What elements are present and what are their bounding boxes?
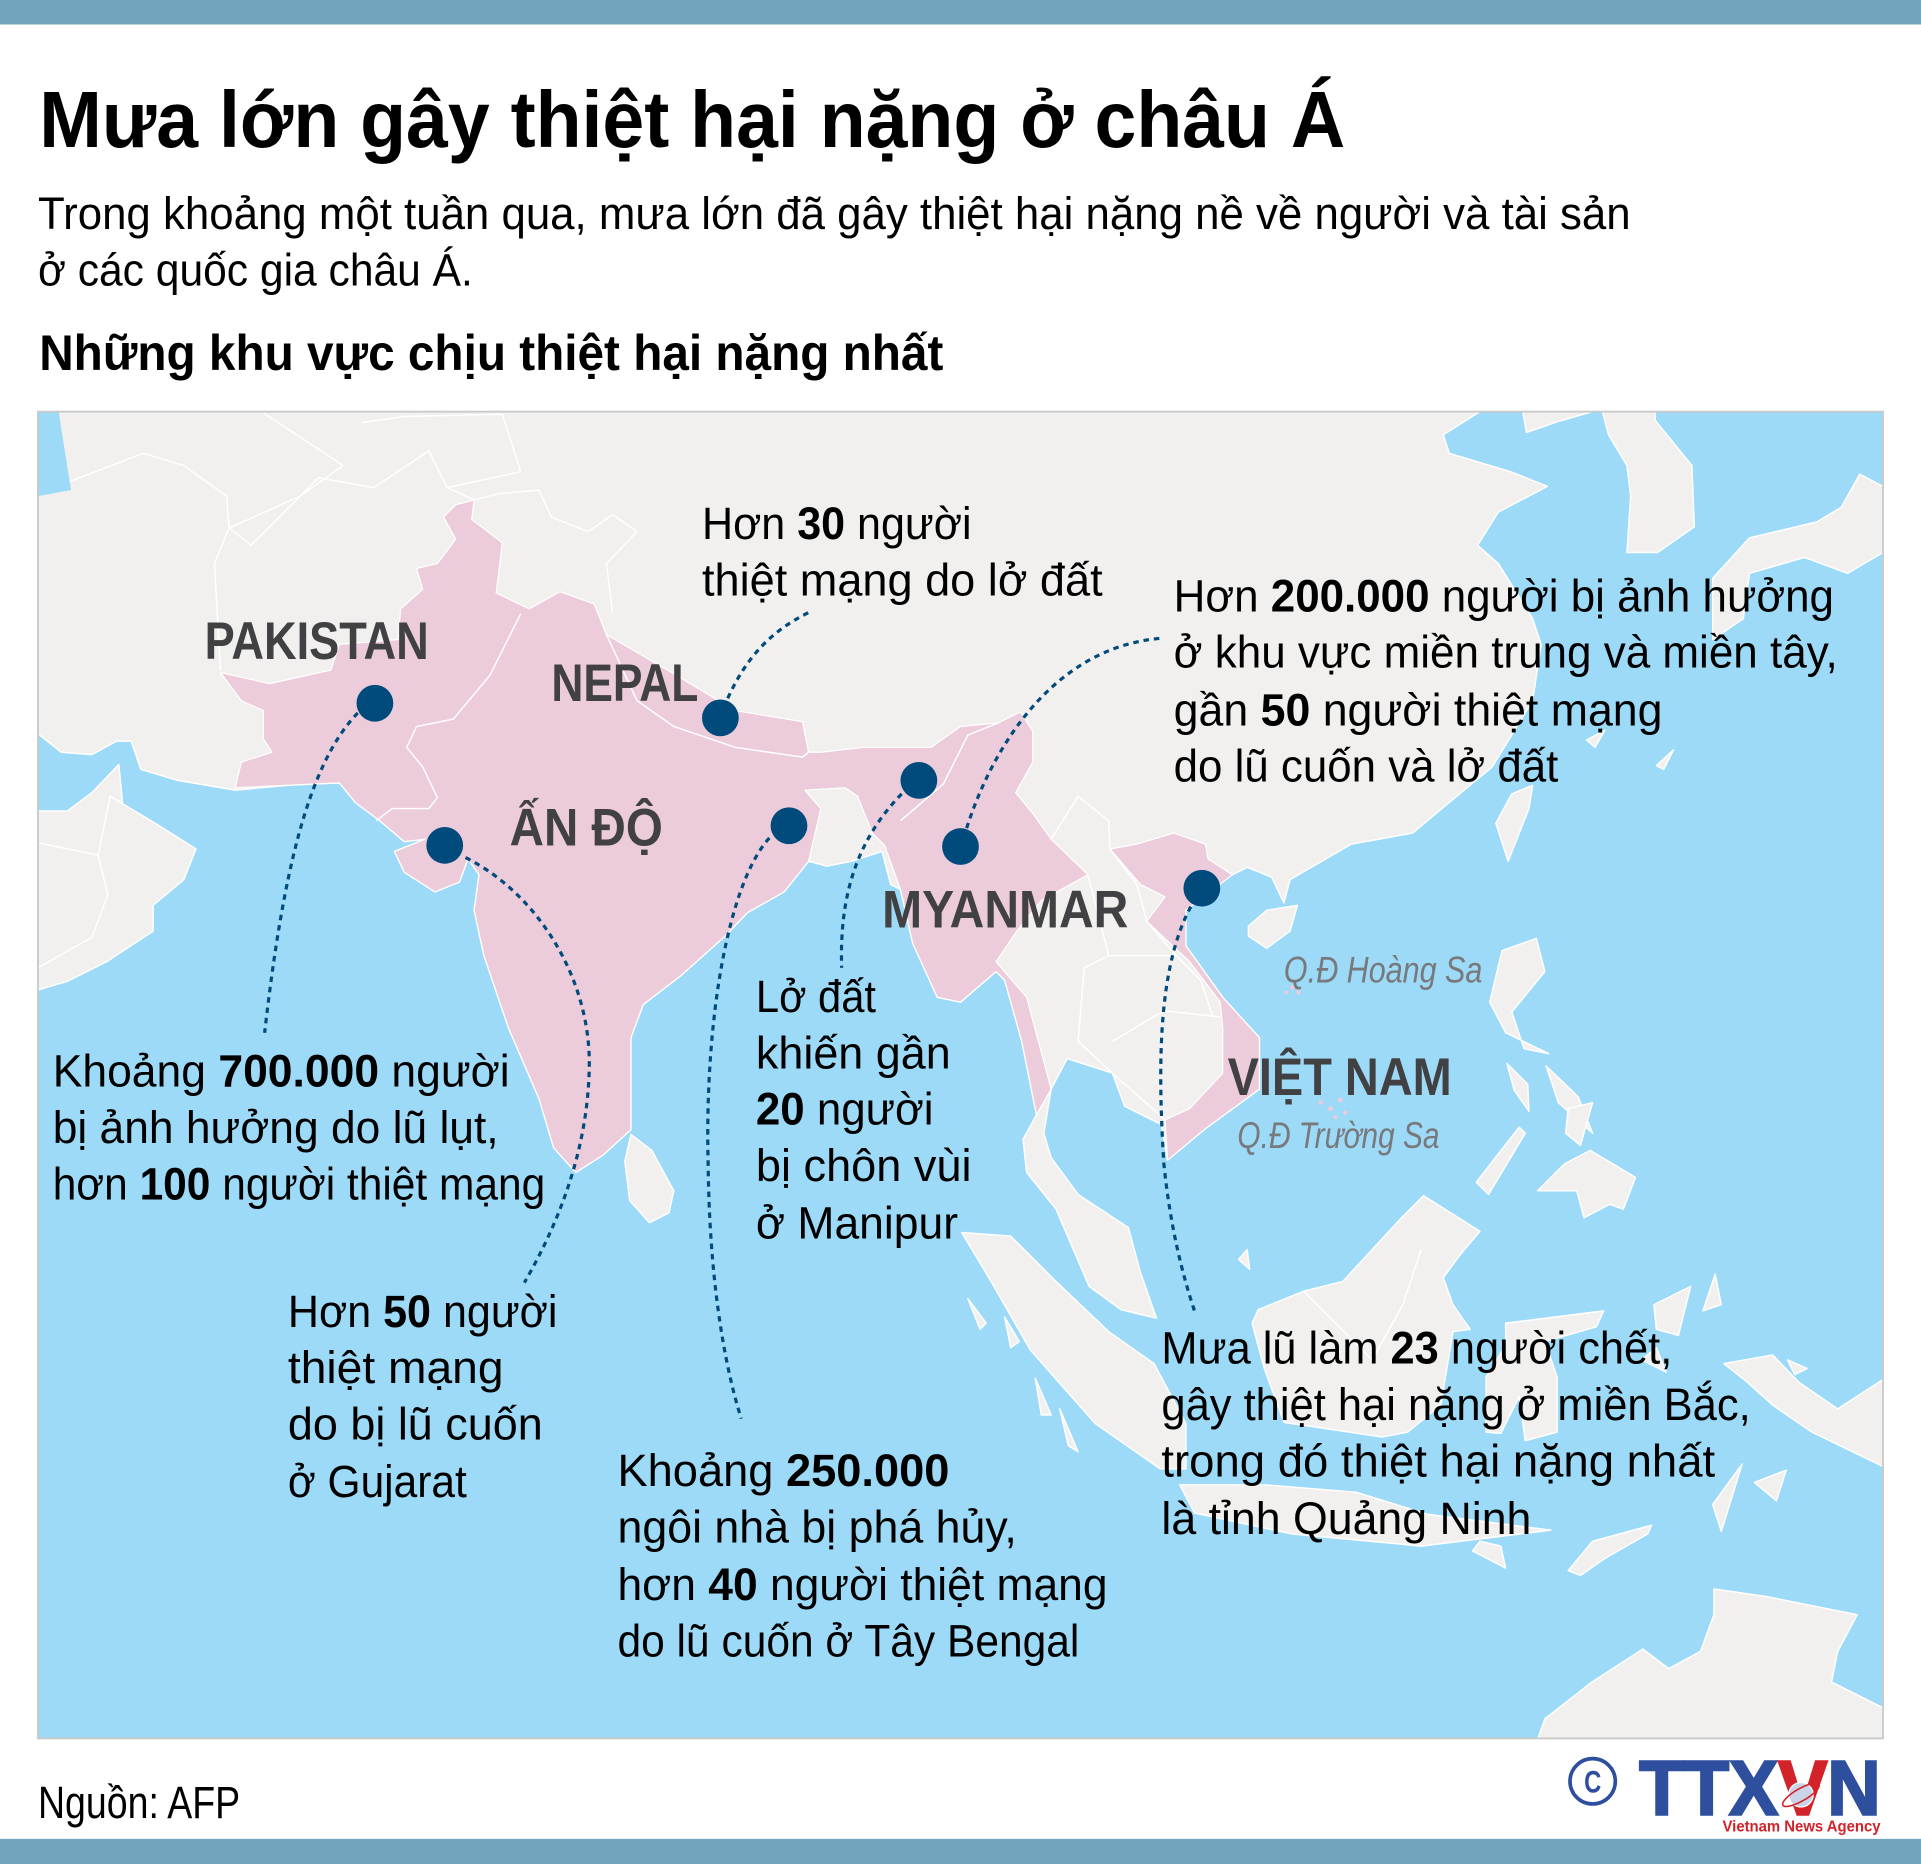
Japan — [1713, 474, 1883, 640]
Arabia — [38, 764, 196, 990]
intro text: Trong khoảng một tuần qua, mưa lớn đã gây thiệt hại nặng nề về người và tài sản — [38, 188, 1631, 239]
callout: Gujarat: ở Gujarat — [288, 1456, 467, 1507]
islands: Hoàng Sa and Trường Sa — [1285, 985, 1347, 1119]
callout: Pakistan: bị ảnh hưởng do lũ lụt, — [53, 1102, 499, 1153]
callout: Myanmar: do lũ cuốn và lở đất — [1174, 741, 1559, 792]
icon: globe — [1780, 1779, 1822, 1810]
small islands — [1587, 730, 1605, 747]
New Guinea — [1724, 1355, 1883, 1466]
callout: West Bengal: hơn 40 người thiệt mạng — [617, 1559, 1108, 1610]
callout: Vietnam — [1161, 1323, 1751, 1544]
callout: Myanmar: Hơn 200.000 người bị ảnh hưởng — [1174, 570, 1834, 621]
icon: copyright — [1570, 1759, 1615, 1804]
callout: Myanmar — [1174, 570, 1838, 792]
callout: Gujarat — [288, 1286, 557, 1507]
callout: Nepal: Hơn 30 người — [702, 498, 972, 549]
Borneo — [1252, 1196, 1480, 1437]
callout: Manipur: ở Manipur — [756, 1198, 958, 1249]
callout: Myanmar: gần 50 người thiệt mạng — [1174, 684, 1662, 735]
country borders — [38, 413, 1421, 1360]
label: Trường Sa: Q.Đ Trường Sa — [1237, 1115, 1440, 1156]
callout: Pakistan: hơn 100 người thiệt mạng — [53, 1158, 545, 1209]
country label: Vietnam: VIỆT NAM — [1228, 1048, 1452, 1107]
callout: Vietnam: Mưa lũ làm 23 người chết, — [1161, 1323, 1672, 1374]
title: Mưa lớn gây thiệt hại nặng ở châu Á — [39, 75, 1345, 164]
callout: Vietnam: là tỉnh Quảng Ninh — [1161, 1493, 1531, 1544]
callout: Gujarat: do bị lũ cuốn — [288, 1399, 543, 1450]
callout: West Bengal: ngôi nhà bị phá hủy, — [617, 1501, 1017, 1552]
callout: Vietnam: gây thiệt hại nặng ở miền Bắc, — [1161, 1379, 1751, 1430]
panel: map — [38, 412, 1883, 1740]
country label: Pakistan: PAKISTAN — [205, 612, 429, 671]
inland water — [38, 412, 71, 496]
Philippines — [1490, 938, 1549, 1054]
Java and Sunda — [1180, 1485, 1551, 1546]
Sumatra — [962, 1232, 1186, 1469]
top bar — [0, 0, 1921, 25]
intro text: ở các quốc gia châu Á. — [38, 244, 473, 295]
callout: Manipur: Lở đất — [756, 971, 876, 1022]
callout: Manipur: khiến gần — [756, 1027, 951, 1078]
callout: Pakistan: Khoảng 700.000 người — [53, 1046, 510, 1097]
country label: Nepal: NEPAL — [551, 654, 698, 713]
callout: Gujarat: Hơn 50 người — [288, 1286, 557, 1337]
land masses — [38, 412, 1883, 1740]
logo: TTXVN: Vietnam News Agency — [1723, 1819, 1881, 1836]
highlighted country: Vietnam — [1110, 833, 1259, 1160]
source: Nguồn: AFP — [38, 1777, 240, 1828]
callout: Vietnam: trong đó thiệt hại nặng nhất — [1161, 1435, 1716, 1486]
callout: Nepal — [702, 498, 1103, 605]
callout: Gujarat: thiệt mạng — [288, 1342, 504, 1393]
highlighted countries: India, Pakistan, Nepal, Myanmar — [221, 494, 1088, 1172]
callout: West Bengal: Khoảng 250.000 — [617, 1445, 949, 1496]
label: Hoàng Sa: Q.Đ Hoàng Sa — [1284, 950, 1482, 991]
callout: Myanmar: ở khu vực miền trung và miền tây, — [1174, 627, 1838, 678]
Hainan — [1248, 905, 1297, 948]
icon: copyright: C — [1584, 1763, 1601, 1799]
Sri Lanka — [625, 1134, 674, 1223]
callout: Manipur: 20 người — [756, 1084, 934, 1135]
dashed leader lines — [265, 613, 1194, 1419]
country label: India: ẤN ĐỘ — [510, 798, 663, 857]
location markers — [357, 685, 1220, 907]
callout: West Bengal: do lũ cuốn ở Tây Bengal — [617, 1615, 1079, 1666]
Sulawesi — [1486, 1311, 1604, 1441]
internal borders of highlighted countries — [376, 614, 998, 821]
intro text — [38, 188, 1631, 295]
bottom bar — [0, 1839, 1921, 1864]
callout: Nepal: thiệt mạng do lở đất — [702, 554, 1103, 605]
section heading: Những khu vực chịu thiệt hại nặng nhất — [39, 325, 944, 381]
country label: Myanmar: MYANMAR — [882, 880, 1128, 939]
callout: Pakistan — [53, 1046, 545, 1209]
Taiwan — [1496, 785, 1533, 861]
Korea / Manchuria — [1523, 412, 1593, 432]
callout: West Bengal — [617, 1445, 1108, 1666]
callout: Manipur: bị chôn vùi — [756, 1140, 972, 1191]
logo: TTXVN: TTXVN — [1639, 1745, 1881, 1831]
Australia — [1538, 1589, 1883, 1740]
map frame — [38, 412, 1883, 1738]
callout: Manipur — [756, 971, 972, 1249]
